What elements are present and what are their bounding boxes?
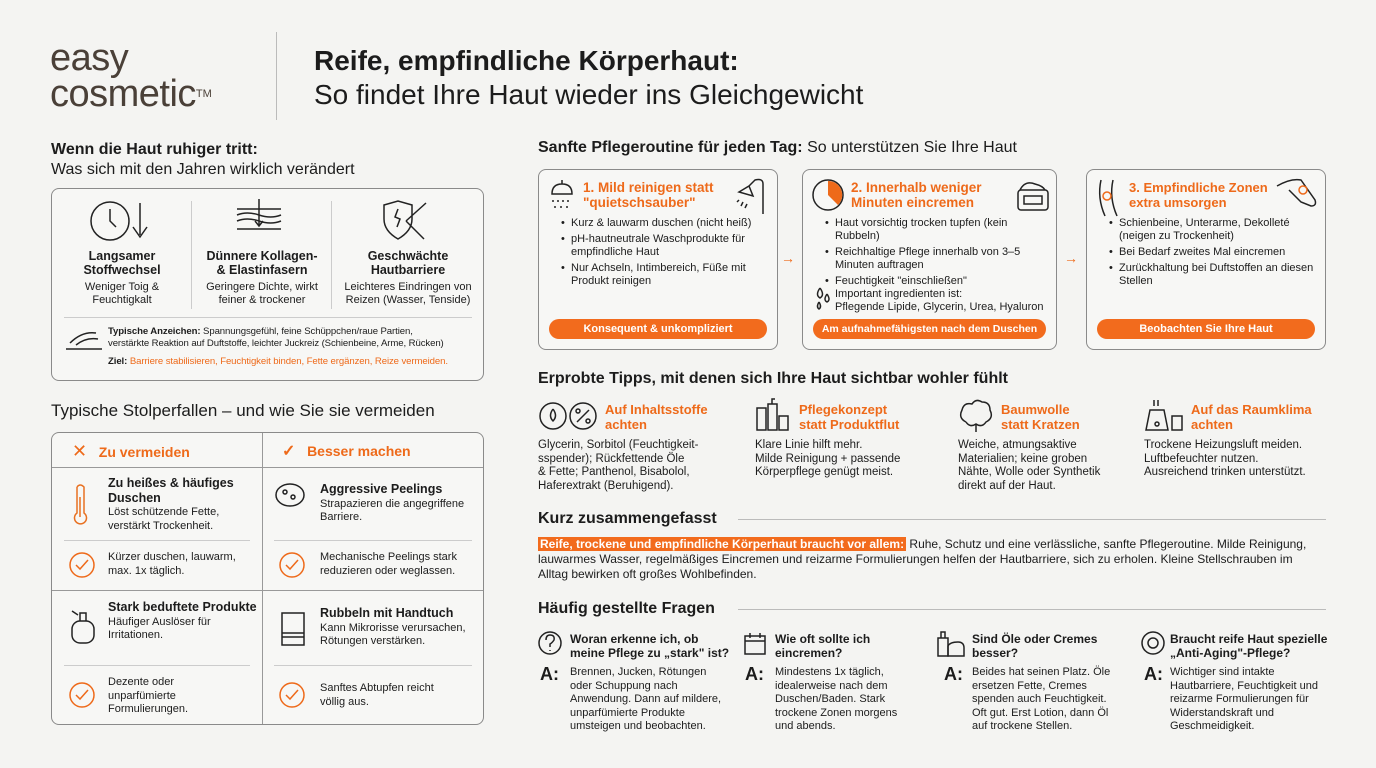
faq 4: A: <box>1144 664 1163 684</box>
icon: drops <box>816 288 830 310</box>
panel: step 3: Zurückhaltung bei Duftstoffen an diesen Stellen <box>1119 262 1313 287</box>
heading: pitfalls: Typische Stolperfallen – und wie Sie sie vermeiden <box>51 401 435 420</box>
table: pitfalls: Rubbeln mit Handtuch <box>320 606 453 620</box>
panel: step 1: Konsequent & unkompliziert <box>583 323 733 335</box>
faq 3 <box>937 631 1110 732</box>
icon: hand <box>66 332 102 350</box>
heading: routine: Sanfte Pflegeroutine für jeden Tag: So unterstützen Sie Ihre Haut <box>538 139 1017 156</box>
faq 1: Woran erkenne ich, ob <box>570 632 698 646</box>
heading: tips: Erprobte Tipps, mit denen sich Ihre Haut sichtbar wohler fühlt <box>538 370 1008 387</box>
tip 2: Milde Reinigung + passende <box>755 452 900 464</box>
heading: changes: Was sich mit den Jahren wirklich verändert <box>51 161 355 178</box>
faq 3: Beides hat seinen Platz. Öle <box>972 666 1110 678</box>
row1 <box>74 484 88 525</box>
title: So findet Ihre Haut wieder ins Gleichgewicht <box>314 79 863 110</box>
table: pitfalls: Strapazieren die angegriffene Barriere. <box>320 498 464 523</box>
panel: changes: & Elastinfasern <box>216 263 308 277</box>
faq 1: A: <box>540 664 559 684</box>
table: pitfalls: Löst schützende Fette, verstärkt Trockenheit. <box>108 506 219 532</box>
header: avoid: ✕ Zu vermeiden <box>72 441 190 461</box>
panel: step 3: extra umsorgen <box>1129 195 1227 210</box>
table: pitfalls: Dezente oder <box>108 676 174 688</box>
tip 4 <box>1144 400 1312 478</box>
faq 1: oder Schuppung nach <box>570 680 678 692</box>
faq 1: umsteigen und beobachten. <box>570 720 706 732</box>
logo: cosmeticTM <box>50 73 212 115</box>
title: Reife, empfindliche Körperhaut: <box>314 45 739 76</box>
panel: step 2: 2. Innerhalb weniger <box>851 180 982 195</box>
tip 3 <box>958 400 1100 492</box>
panel: step 1: "quietschsauber" <box>583 195 696 210</box>
panel: changes: Feuchtigkalt <box>92 294 152 306</box>
icon: clock <box>90 201 148 241</box>
header: better: ✓ Besser machen <box>282 443 411 460</box>
tip 2: Körperpflege genügt meist. <box>755 466 893 478</box>
faq 4: Wichtiger sind intakte <box>1170 666 1275 678</box>
panel: changes <box>51 188 484 381</box>
tip 2: Pflegekonzept <box>799 402 887 417</box>
panel: step 1: Nur Achseln, Intimbereich, Füße mit Produkt reinigen <box>571 262 746 287</box>
panel: step 2: Haut vorsichtig trocken tupfen (kein Rubbeln) <box>835 217 1007 242</box>
faq 2: trockene Zonen morgens <box>775 706 897 718</box>
panel: changes: Reizen (Wasser, Tenside) <box>346 294 470 306</box>
logo <box>50 37 212 115</box>
faq 2: eincremen? <box>775 646 842 660</box>
summary text: Reife, trockene und empfindliche Körperhaut braucht vor allem: Ruhe, Schutz und eine verlässliche, sanfte Pflegeroutine. Milde Reinigung, lauwarmes Wasser, regelmäßiges Eincremen und reizarme Formulierungen helfen der Hautbarriere, sich zu erholen. Kleine Stellschrauben im Alltag bewirken oft großes Wohlbefinden. <box>538 537 1306 581</box>
logo: easy <box>50 37 128 79</box>
panel: step 2: Minuten eincremen <box>851 195 974 210</box>
arrow: → <box>781 250 795 266</box>
faq 2: und abends. <box>775 720 836 732</box>
tip 3: direkt auf der Haut. <box>958 480 1056 492</box>
heading: changes <box>51 141 355 178</box>
tip 4: Auf das Raumklima <box>1191 402 1312 417</box>
arrow: → <box>1064 250 1078 266</box>
panel: step 2: Am aufnahmefähigsten nach dem Duschen <box>822 323 1037 335</box>
tip 1: sspender); Rückfettende Öle <box>538 452 684 464</box>
table: pitfalls: Häufiger Auslöser für Irritationen. <box>108 616 211 641</box>
faq 2 <box>744 632 897 732</box>
tip 1 <box>538 402 708 492</box>
faq 4: Widerstandskraft und <box>1170 706 1274 718</box>
panel: changes: Geringere Dichte, wirkt <box>206 281 318 293</box>
faq 3: besser? <box>972 646 1018 660</box>
tip 1: & Fette; Panthenol, Bisabolol, <box>538 466 690 478</box>
panel: step 3: Bei Bedarf zweites Mal eincremen <box>1119 246 1285 258</box>
faq 2: Wie oft sollte ich <box>775 632 870 646</box>
panel: step 1: Kurz & lauwarm duschen (nicht heiß) <box>571 217 751 229</box>
panel: changes: Typische Anzeichen: Spannungsgefühl, feine Schüppchen/raue Partien, <box>108 326 413 337</box>
panel: step 2: Feuchtigkeit "einschließen" <box>835 275 967 287</box>
table: pitfalls: Mechanische Peelings stark <box>320 551 457 563</box>
tip 4: Trockene Heizungsluft meiden. <box>1144 439 1302 451</box>
heading: changes: Wenn die Haut ruhiger tritt: <box>51 141 258 158</box>
tip 3: Nähte, Wolle oder Synthetik <box>958 466 1100 478</box>
table: pitfalls: Zu heißes & häufiges Duschen <box>108 476 234 504</box>
faq 3: Sind Öle oder Cremes <box>972 632 1097 646</box>
tip 3: statt Kratzen <box>1001 417 1080 432</box>
table: pitfalls: völlig aus. <box>320 696 369 708</box>
title <box>314 45 864 110</box>
panel: step 2 <box>802 169 1057 350</box>
faq 4 <box>1141 631 1327 732</box>
table: pitfalls: Kann Mikrorisse verursachen, Rötungen verstärken. <box>320 622 466 647</box>
panel: changes: Ziel: Barriere stabilisieren, Feuchtigkeit binden, Fette ergänzen, Reize vermeiden. <box>108 356 448 367</box>
faq 3: A: <box>944 664 963 684</box>
panel: changes: Weniger Toig & <box>85 281 159 293</box>
heading: FAQ: Häufig gestellte Fragen <box>538 600 715 617</box>
faq 4: „Anti-Aging"-Pflege? <box>1170 646 1290 660</box>
faq 2: A: <box>745 664 764 684</box>
faq 2: Mindestens 1x täglich, <box>775 666 884 678</box>
tip 2 <box>755 398 900 478</box>
tip 1: Glycerin, Sorbitol (Feuchtigkeit- <box>538 439 698 451</box>
panel: changes: Leichteres Eindringen von <box>344 281 472 293</box>
panel: changes: verstärkte Reaktion auf Duftstoffe, leichter Juckreiz (Schienbeine, Arme, Rücken) <box>108 338 444 349</box>
panel: step 2: Pflegende Lipide, Glycerin, Urea, Hyaluron <box>835 301 1044 313</box>
table: pitfalls: unparfümierte <box>108 690 176 702</box>
heading: summary: Kurz zusammengefasst <box>538 510 717 527</box>
tip 1: Auf Inhaltsstoffe <box>605 402 708 417</box>
faq 4: Braucht reife Haut spezielle <box>1170 632 1327 646</box>
tip 3: Baumwolle <box>1001 402 1070 417</box>
table: pitfalls: Aggressive Peelings <box>320 482 442 496</box>
faq 3: ersetzen Fette, Cremes <box>972 680 1087 692</box>
faq 4: Geschmeidigkeit. <box>1170 720 1254 732</box>
tip 4: Luftbefeuchter nutzen. <box>1144 452 1258 464</box>
table: pitfalls: reduzieren oder weglassen. <box>320 564 455 576</box>
tip 1: achten <box>605 417 647 432</box>
panel: step 2: Important ingredienten ist: <box>835 288 962 300</box>
icon: skin layers <box>236 199 282 230</box>
table: pitfalls: Sanftes Abtupfen reicht <box>320 682 434 694</box>
faq 3: auf trockene Stellen. <box>972 720 1072 732</box>
panel: step 3 <box>1086 169 1326 350</box>
faq 2: idealerweise nach dem <box>775 680 888 692</box>
panel: changes: feiner & trockener <box>219 294 305 306</box>
faq 1: meine Pflege zu „stark" ist? <box>570 646 729 660</box>
table: pitfalls: Formulierungen. <box>108 703 188 715</box>
faq 1 <box>538 631 729 732</box>
faq 1: Anwendung. Dann auf mildere, <box>570 693 721 705</box>
tip 3: Weiche, atmungsaktive <box>958 439 1077 451</box>
tip 4: achten <box>1191 417 1233 432</box>
panel: changes: Stoffwechsel <box>83 263 161 277</box>
panel: step 2: Reichhaltige Pflege innerhalb von 3–5 Minuten auftragen <box>835 246 1020 271</box>
tip 1: Haferextrakt (Beruhigend). <box>538 480 674 492</box>
faq 3: spenden auch Feuchtigkeit. <box>972 693 1107 705</box>
faq 4: Hautbarriere, Feuchtigkeit und <box>1170 680 1318 692</box>
panel: changes: Hautbarriere <box>371 263 445 277</box>
panel: changes: Langsamer <box>89 249 155 263</box>
faq 1: unparfümierte Produkte <box>570 706 685 718</box>
table: pitfalls: max. 1x täglich. <box>108 564 184 576</box>
faq 4: reizarme Formulierungen für <box>1170 693 1309 705</box>
panel: changes: Geschwächte <box>368 249 448 263</box>
row2 <box>71 610 95 644</box>
panel: step 3: Schienbeine, Unterarme, Dekolleté (neigen zu Trockenheit) <box>1119 217 1290 242</box>
faq 2: Duschen/Baden. Stark <box>775 693 885 705</box>
table: pitfalls <box>51 432 484 725</box>
panel: step 1 <box>538 169 778 350</box>
panel: step 1: pH-hautneutrale Waschprodukte für empfindliche Haut <box>571 233 745 258</box>
tip 2: statt Produktflut <box>799 417 899 432</box>
tip 4: Ausreichend trinken unterstützt. <box>1144 466 1306 478</box>
table: pitfalls: Kürzer duschen, lauwarm, <box>108 551 236 563</box>
faq 3: Oft gut. Erst Lotion, dann Öl <box>972 706 1108 718</box>
tip 3: Materialien; keine groben <box>958 452 1087 464</box>
panel: step 1: 1. Mild reinigen statt <box>583 180 714 195</box>
faq 1: Brennen, Jucken, Rötungen <box>570 666 706 678</box>
table: pitfalls: Stark beduftete Produkte <box>108 600 257 614</box>
icon: shield <box>383 200 426 240</box>
panel: step 3: Beobachten Sie Ihre Haut <box>1139 323 1273 335</box>
panel: changes: Dünnere Kollagen- <box>206 249 318 263</box>
panel: step 3: 3. Empfindliche Zonen <box>1129 180 1268 195</box>
tip 2: Klare Linie hilft mehr. <box>755 439 862 451</box>
